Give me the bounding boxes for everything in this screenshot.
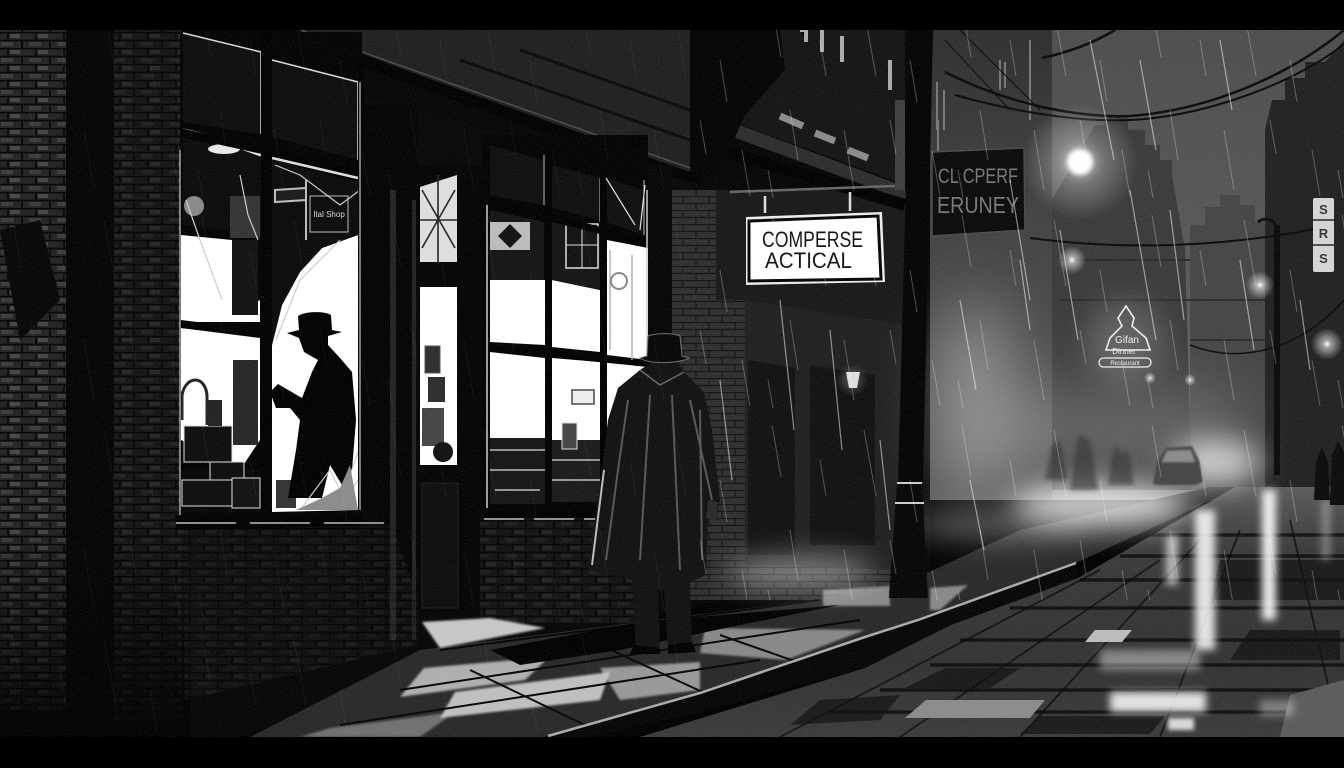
lamppost [889, 30, 933, 598]
neon sign: Restaurant [1110, 361, 1140, 367]
hanging white shop sign: COMPERSE [762, 227, 863, 252]
glowing streetlamp [1022, 104, 1138, 220]
vertical building sign: S [1319, 251, 1328, 266]
light paving patches [905, 700, 1045, 718]
neon sign: Dinner [1112, 347, 1136, 356]
sign bracket [730, 186, 895, 192]
brick risers under windows [176, 165, 672, 700]
interior tables [490, 390, 600, 504]
right brick facade [668, 30, 908, 600]
silhouette in window [270, 312, 356, 498]
wet street [640, 487, 1344, 737]
lit paving slabs [300, 585, 968, 737]
left lower pane [181, 235, 260, 470]
upper facade masonry [275, 30, 700, 190]
night sky [1040, 30, 1344, 500]
vertical building sign: R [1319, 226, 1329, 241]
shop door [417, 165, 487, 615]
window mullions [176, 32, 364, 530]
streetlamp right with pole [1058, 219, 1343, 475]
bright panes [490, 240, 648, 500]
neon sign: Gifan [1115, 335, 1139, 346]
distant pedestrians [1045, 435, 1134, 490]
foreground pedestrians right [1314, 441, 1344, 505]
dark hanging sign [932, 148, 1025, 236]
shop window right [483, 135, 650, 518]
hanging notice in window: Ital Shop [313, 210, 345, 219]
overhead wires [945, 30, 1344, 354]
left brick wall [0, 30, 190, 737]
neon sign [1099, 306, 1151, 367]
shop window left with silhouette [176, 32, 364, 530]
hanging notice in window [310, 196, 348, 232]
top dark panes [490, 145, 644, 235]
interior shelves [181, 380, 296, 512]
vertical building sign [1313, 198, 1334, 272]
door glass with posters [420, 287, 457, 465]
door transom glass [420, 175, 457, 262]
parked car [1153, 446, 1203, 485]
dark hanging sign: CL CPERF [938, 165, 1018, 188]
distant city buildings [930, 30, 1344, 500]
hat [640, 334, 689, 363]
dark hanging sign: ERUNEY [937, 192, 1019, 218]
upper window panes [183, 33, 358, 160]
shattered glass cracks [186, 165, 360, 510]
mist and fog [725, 300, 1260, 588]
wall lamp [836, 364, 868, 396]
central pilaster [362, 105, 418, 645]
curb [545, 563, 1078, 737]
street light reflections [1100, 490, 1330, 730]
man in trench coat [588, 334, 720, 654]
hanging white shop sign [730, 186, 895, 285]
hanging white shop sign: ACTICAL [765, 248, 852, 273]
sidewalk [250, 487, 1240, 737]
right lower pane white [272, 235, 358, 512]
building shopfront base [0, 30, 930, 737]
shadow at the man's feet [490, 605, 840, 665]
vertical building sign: S [1319, 202, 1328, 217]
